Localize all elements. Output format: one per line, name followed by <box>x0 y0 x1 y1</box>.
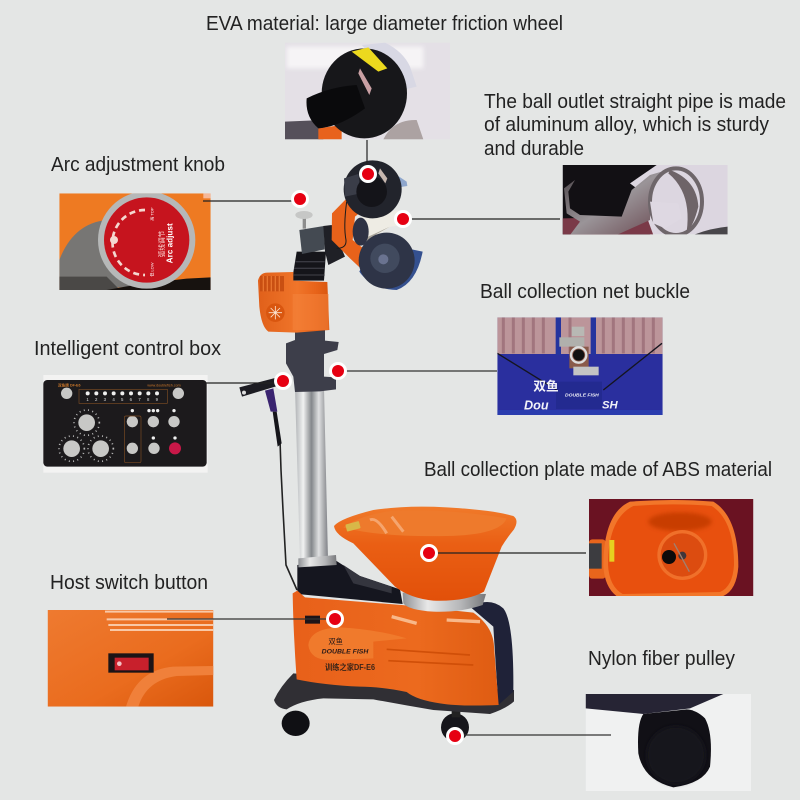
host switch on base <box>305 616 320 624</box>
light numbers: 3 <box>104 397 107 402</box>
callout: arc adjustment knob <box>51 154 308 290</box>
robot head in photo <box>572 327 584 336</box>
photo: control panel: 双鱼牌 DF-E6 <box>58 383 81 388</box>
upper friction wheel <box>387 168 407 187</box>
heading: Nylon fiber pulley <box>588 648 735 670</box>
black pole housing <box>297 560 403 604</box>
control cable <box>280 440 297 590</box>
bellows <box>292 252 326 281</box>
heading: Ball collection net buckle <box>480 281 690 303</box>
leader line <box>462 734 611 736</box>
description text: The ball outlet straight pipe is made <box>484 91 786 113</box>
description text: of aluminum alloy, which is sturdy <box>484 114 769 136</box>
photo: collection net: DOUBLE FISH <box>565 393 599 399</box>
mounting clamp <box>286 330 339 392</box>
leader line <box>167 618 328 620</box>
callout: intelligent control box <box>34 338 290 473</box>
control knobs <box>61 388 184 457</box>
light numbers: 4 <box>112 397 115 402</box>
machine: table tennis robot <box>239 160 517 741</box>
leader line <box>203 200 293 202</box>
photo: red knob: 高 TOP <box>148 207 154 221</box>
knob scale dots <box>59 410 113 461</box>
lower base assembly: 训练之家DF-E6 <box>325 662 375 672</box>
photo: control panel <box>43 375 208 473</box>
photo: collection net: 双鱼 <box>533 379 559 394</box>
leader line <box>436 552 586 554</box>
lower base assembly: 双鱼 <box>328 637 343 646</box>
photo: bowl from above <box>589 499 753 598</box>
arc adjustment knob <box>303 217 306 229</box>
castor wheel right <box>441 713 469 741</box>
light numbers: 6 <box>130 397 133 402</box>
heading: Ball collection plate made of ABS material <box>424 459 772 481</box>
photo: collection net: SH <box>602 399 619 411</box>
marker dot <box>276 374 290 388</box>
marker dot <box>292 192 308 206</box>
lower friction wheel <box>359 249 423 290</box>
power button <box>169 442 181 454</box>
leader line <box>366 140 368 172</box>
pole collar <box>298 555 337 567</box>
callout: EVA friction wheel <box>206 13 563 182</box>
photo: friction wheel <box>285 43 424 140</box>
heading: EVA material: large diameter friction wheel <box>206 13 563 35</box>
light numbers: 5 <box>121 397 124 402</box>
light numbers: 9 <box>156 397 159 402</box>
ball outlet silver pipe <box>362 210 404 245</box>
remote controller <box>239 378 277 397</box>
photo: pipe close-up <box>563 165 728 235</box>
heading: Arc adjustment knob <box>51 154 225 176</box>
leader line <box>410 218 560 220</box>
callout: aluminum outlet pipe <box>396 91 786 235</box>
callout: net buckle <box>330 281 690 415</box>
marker dot <box>328 612 342 626</box>
orange arm <box>332 198 365 269</box>
photo: red knob: 弧线调节 <box>157 230 166 257</box>
base brand text: DOUBLE FISH <box>322 648 369 655</box>
heading: Host switch button <box>50 572 208 594</box>
marker dot <box>360 166 376 182</box>
base stand plate <box>274 673 514 714</box>
leader line <box>206 382 276 384</box>
indicator lights <box>86 391 177 440</box>
light numbers: 7 <box>138 397 141 402</box>
photo: control panel: www.doublefish.com <box>147 384 181 388</box>
callout: ball collection plate <box>422 459 772 598</box>
marker dot <box>330 364 346 378</box>
photo: collection net <box>497 317 663 415</box>
photo: red knob: Arc adjust <box>166 223 175 263</box>
upper head assembly <box>239 160 423 447</box>
light numbers: 8 <box>147 397 150 402</box>
photo: red knob <box>59 191 211 290</box>
photo: rocker switch <box>48 610 213 707</box>
castor wheel left <box>282 711 310 736</box>
leader line <box>345 370 497 372</box>
light numbers: 1 <box>86 397 89 402</box>
lower base assembly <box>274 507 517 741</box>
silver bowl ring <box>403 593 486 612</box>
orange ball collection bowl <box>334 507 517 601</box>
callout: host switch button <box>48 572 342 707</box>
orange control housing <box>258 272 329 333</box>
callout: nylon fiber pulley <box>448 648 751 791</box>
photo: collection net: Dou <box>524 398 549 412</box>
navy rear cover <box>470 602 513 705</box>
grey motor block <box>299 226 325 254</box>
photo: castor wheel <box>586 694 751 791</box>
heading: Intelligent control box <box>34 338 221 360</box>
orange base shell <box>293 591 499 706</box>
description text: and durable <box>484 138 584 160</box>
photo: red knob: 低 LOW <box>148 262 154 277</box>
marker dot <box>422 546 436 560</box>
marker dot <box>396 212 410 226</box>
light numbers: 2 <box>95 397 98 402</box>
marker dot <box>448 728 462 744</box>
aluminium pole <box>295 388 328 560</box>
